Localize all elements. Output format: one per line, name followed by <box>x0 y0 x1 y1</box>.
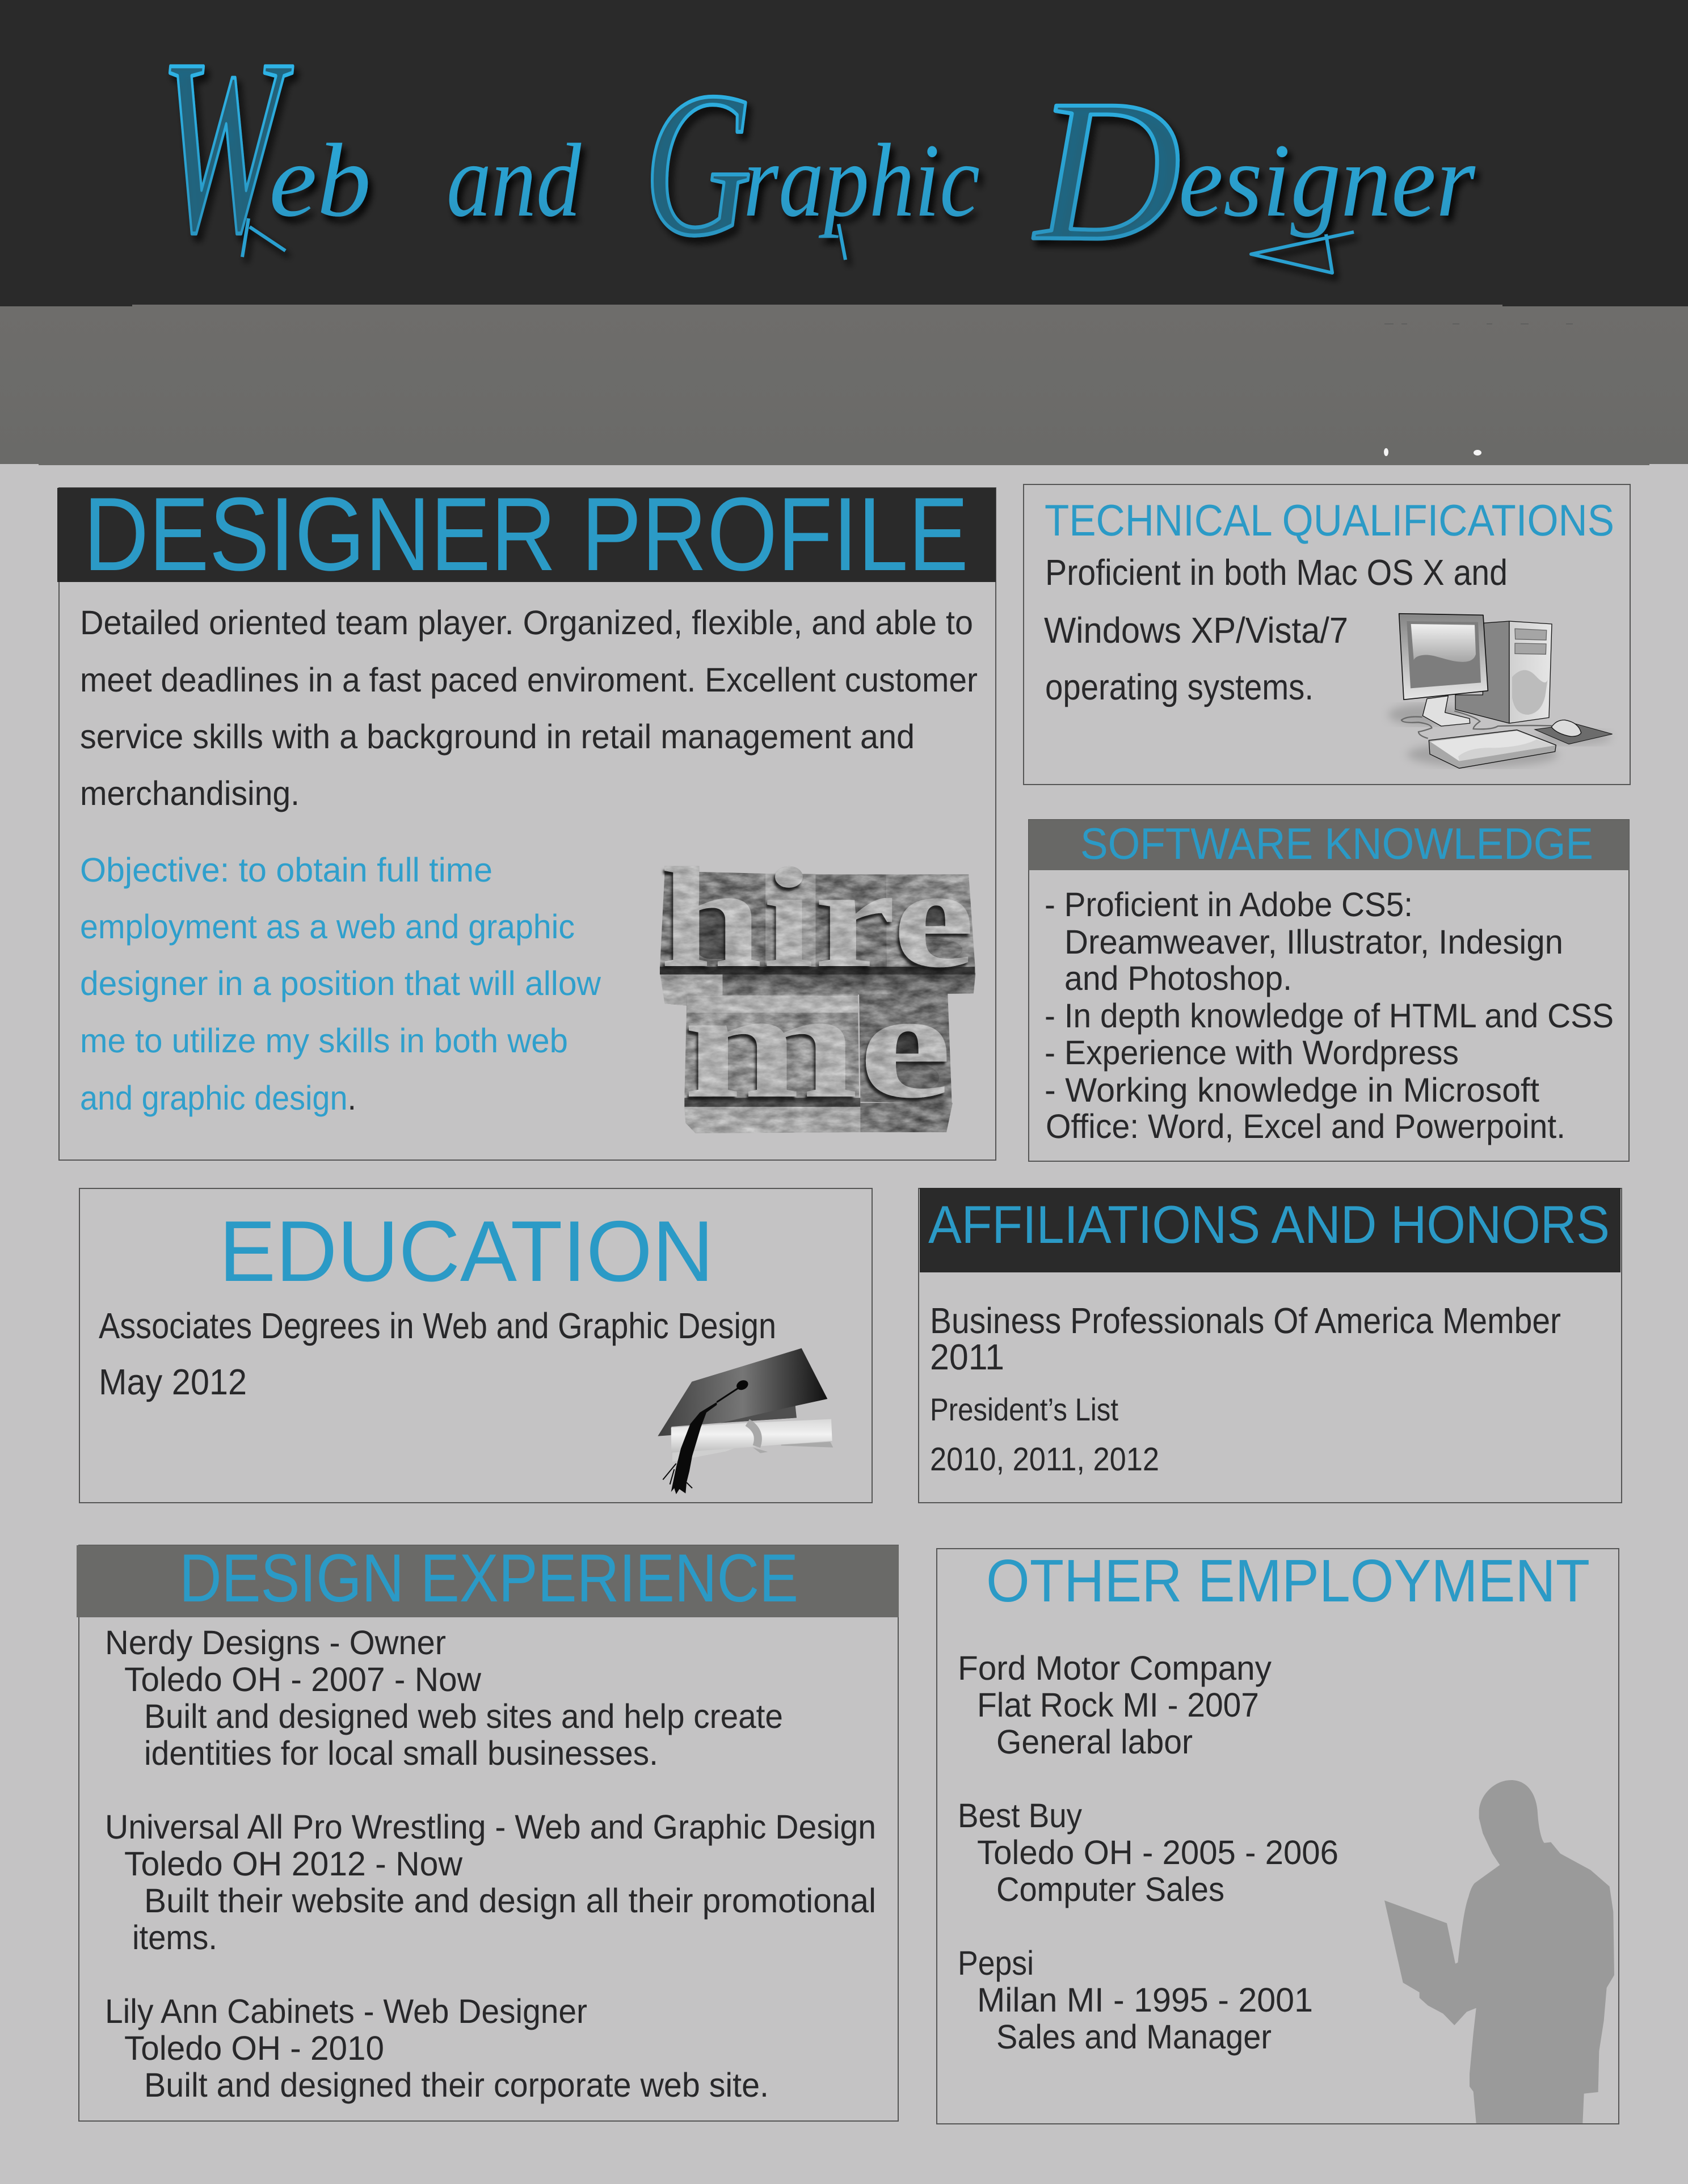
job: Nerdy Designs: identities for local small businesses. <box>144 1734 658 1772</box>
objective text: me to utilize my skills in both web <box>80 1022 568 1060</box>
job: Pepsi: Pepsi <box>958 1944 1034 1982</box>
software list: - In depth knowledge of HTML and CSS <box>1045 997 1614 1035</box>
objective text: and graphic design. <box>80 1079 356 1117</box>
panel: software knowledge <box>1029 819 1629 1161</box>
heading bar: affiliations and honors: AFFILIATIONS AND HONORS <box>928 1195 1610 1254</box>
title: eb <box>269 123 371 239</box>
job: Nerdy Designs: Built and designed web sites and help create <box>144 1697 783 1735</box>
job: Best Buy: Best Buy <box>958 1797 1082 1835</box>
header banner <box>0 0 1688 465</box>
job: Lily Ann Cabinets: Built and designed their corporate web site. <box>144 2066 769 2104</box>
education text: May 2012 <box>99 1361 247 1402</box>
icon: desktop computer <box>1388 614 1613 768</box>
job: Universal All Pro Wrestling: items. <box>132 1919 217 1957</box>
panel: education <box>79 1188 872 1503</box>
objective text: Objective: to obtain full time <box>80 851 492 889</box>
job: Lily Ann Cabinets: Lily Ann Cabinets - Web Designer <box>105 1992 587 2030</box>
software list: Office: Word, Excel and Powerpoint. <box>1046 1107 1565 1145</box>
software list: Dreamweaver, Illustrator, Indesign <box>1064 923 1563 961</box>
job: Nerdy Designs <box>105 1624 783 1772</box>
job: Lily Ann Cabinets: Toledo OH - 2010 <box>124 2029 384 2067</box>
heading: technical qualifications: TECHNICAL QUALIFICATIONS <box>1045 495 1614 545</box>
title: G <box>644 49 752 279</box>
panel: other employment <box>937 1548 1619 2124</box>
job: Pepsi: Sales and Manager <box>996 2018 1272 2056</box>
title <box>160 8 1476 284</box>
profile summary text <box>80 604 978 812</box>
qualifications text: operating systems. <box>1045 667 1314 707</box>
job: Nerdy Designs: Toledo OH - 2007 - Now <box>124 1660 482 1698</box>
affiliations text: President’s List <box>930 1392 1118 1427</box>
software list <box>1045 886 1614 1145</box>
profile summary text: service skills with a background in retail management and <box>80 718 915 756</box>
heading bar: designer profile: DESIGNER PROFILE <box>83 475 969 592</box>
heading: other employment: OTHER EMPLOYMENT <box>986 1548 1590 1614</box>
image: hire me letterpress blocks: hire <box>660 838 975 997</box>
job: Ford Motor Company: Ford Motor Company <box>958 1649 1272 1687</box>
panel: design experience <box>77 1540 899 2121</box>
heading bar: design experience: DESIGN EXPERIENCE <box>179 1540 798 1616</box>
panel: technical qualifications <box>1024 484 1630 785</box>
profile summary text: Detailed oriented team player. Organized, flexible, and able to <box>80 604 973 642</box>
affiliations text: 2011 <box>930 1336 1004 1377</box>
objective text <box>80 851 601 1117</box>
software list: - Experience with Wordpress <box>1045 1034 1459 1072</box>
affiliations text: 2010, 2011, 2012 <box>930 1441 1159 1478</box>
qualifications text <box>1044 552 1508 707</box>
image: hire me letterpress blocks <box>660 838 975 1133</box>
title: and <box>447 123 581 239</box>
heading bar: software knowledge: SOFTWARE KNOWLEDGE <box>1080 819 1593 868</box>
title: W <box>160 8 295 284</box>
panel: designer profile <box>57 475 996 1160</box>
heading bar: affiliations and honors <box>920 1188 1620 1272</box>
affiliations text <box>930 1300 1561 1478</box>
job: Ford Motor Company: Flat Rock MI - 2007 <box>977 1686 1259 1724</box>
objective text: designer in a position that will allow <box>80 964 601 1002</box>
job: Universal All Pro Wrestling: Universal All Pro Wrestling - Web and Graphic Design <box>105 1808 876 1846</box>
qualifications text: Windows XP/Vista/7 <box>1044 610 1348 651</box>
job: Ford Motor Company: General labor <box>996 1723 1193 1761</box>
profile summary text: merchandising. <box>80 774 300 812</box>
job: Pepsi: Milan MI - 1995 - 2001 <box>977 1981 1313 2019</box>
objective text: employment as a web and graphic <box>80 908 575 946</box>
job: Ford Motor Company <box>958 1649 1272 1761</box>
job: Pepsi <box>958 1944 1313 2056</box>
affiliations text: Business Professionals Of America Member <box>930 1300 1561 1341</box>
education text: Associates Degrees in Web and Graphic Design <box>99 1305 776 1346</box>
software list: - Proficient in Adobe CS5: <box>1045 886 1413 924</box>
panel: affiliations and honors <box>919 1188 1622 1503</box>
title: raphic <box>743 123 980 239</box>
title: D <box>1032 58 1181 283</box>
job: Best Buy <box>958 1797 1338 1908</box>
icon: graduation cap and diploma <box>658 1348 833 1494</box>
job: Best Buy: Computer Sales <box>996 1870 1224 1908</box>
job: Universal All Pro Wrestling: Built their website and design all their promotional <box>144 1882 876 1920</box>
education text <box>99 1305 776 1402</box>
software list: - Working knowledge in Microsoft <box>1045 1071 1539 1109</box>
job: Best Buy: Toledo OH - 2005 - 2006 <box>977 1833 1338 1871</box>
job: Universal All Pro Wrestling: Toledo OH 2012 - Now <box>124 1845 463 1883</box>
software list: and Photoshop. <box>1064 959 1292 997</box>
profile summary text: meet deadlines in a fast paced enviroment. Excellent customer <box>80 661 978 699</box>
job: Nerdy Designs: Nerdy Designs - Owner <box>105 1624 446 1662</box>
job: Universal All Pro Wrestling <box>105 1808 876 1957</box>
qualifications text: Proficient in both Mac OS X and <box>1045 552 1508 593</box>
image: hire me letterpress blocks: me <box>683 959 952 1131</box>
silhouette: man with laptop <box>1384 1780 1614 2123</box>
heading: education: EDUCATION <box>219 1203 714 1300</box>
title: esigner <box>1178 123 1476 239</box>
job: Lily Ann Cabinets <box>105 1992 769 2104</box>
